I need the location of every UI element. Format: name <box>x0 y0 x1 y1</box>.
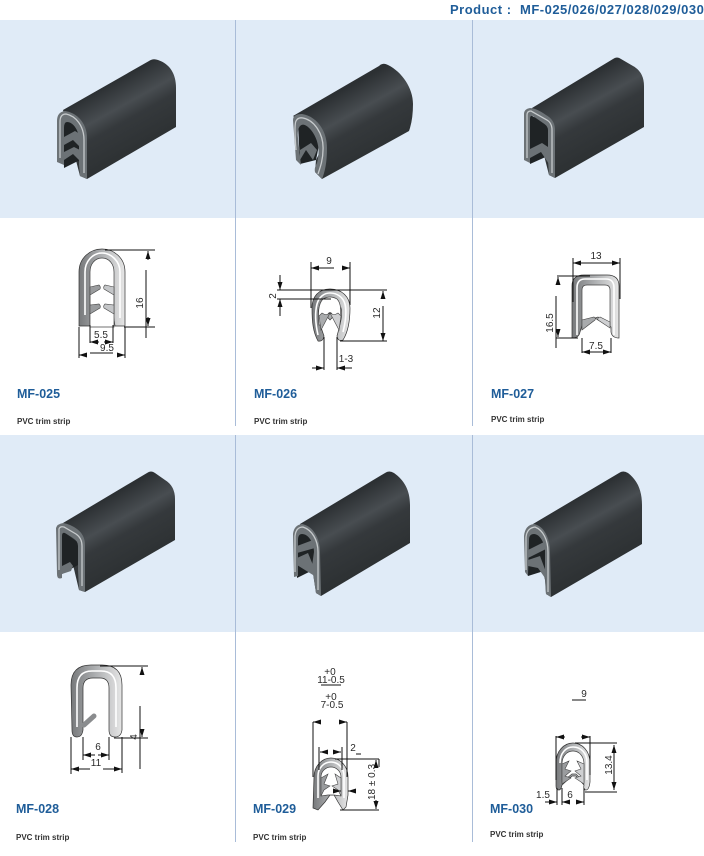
panel: MF-030 <box>490 472 642 839</box>
dimensions: MF-027: 13 <box>590 251 602 262</box>
3D render: MF-026 <box>293 64 413 179</box>
3D render: MF-027 <box>524 58 644 178</box>
3D render: MF-025 <box>57 59 176 179</box>
panel: MF-025 <box>17 59 176 426</box>
label: MF-025: MF-025 <box>17 387 60 401</box>
caption: MF-030: PVC trim strip <box>490 830 543 839</box>
dimensions: MF-028 <box>71 666 148 774</box>
panel: MF-028 <box>16 472 175 842</box>
dimensions: MF-029: +0 <box>324 667 336 678</box>
panel: MF-026 <box>254 64 413 426</box>
dimensions: MF-026: 1-3 <box>339 354 354 365</box>
dimensions: MF-030: 13.4 <box>604 755 615 775</box>
dimensions: MF-029: 18 ± 0.3 <box>367 764 378 800</box>
caption: MF-027: PVC trim strip <box>491 415 544 424</box>
cross-section drawing: MF-026 <box>312 289 350 341</box>
dimensions: MF-026 <box>268 256 387 370</box>
dimensions: MF-028: 6 <box>95 742 101 753</box>
dimensions: MF-027 <box>545 251 620 353</box>
dimensions: MF-026: 9 <box>326 256 332 267</box>
dimensions: MF-030: 9 <box>581 689 587 700</box>
3D render: MF-029 <box>293 472 410 596</box>
3D render: MF-028 <box>56 472 175 592</box>
caption: MF-029: PVC trim strip <box>253 833 306 842</box>
caption: MF-026: PVC trim strip <box>254 417 307 426</box>
dimensions: MF-030: 1.5 <box>536 790 550 801</box>
label: MF-026: MF-026 <box>254 387 297 401</box>
dimensions: MF-026: 2 <box>268 293 279 299</box>
dimensions: MF-029: 7-0.5 <box>321 700 344 711</box>
caption: MF-028: PVC trim strip <box>16 833 69 842</box>
dimensions: MF-027: 7.5 <box>589 341 603 352</box>
dimensions: MF-025 <box>79 250 155 358</box>
panel: MF-029 <box>253 472 410 842</box>
dimensions: MF-030 <box>536 689 617 805</box>
dimensions: MF-030: 6 <box>567 790 573 801</box>
header: product title: MF-025/026/027/028/029/030 <box>520 2 704 17</box>
label: MF-027: MF-027 <box>491 387 534 401</box>
cross-section drawing: MF-025 <box>79 249 125 327</box>
header: product title: Product : <box>450 2 512 17</box>
label: MF-028: MF-028 <box>16 802 59 816</box>
cross-section drawing: MF-030 <box>556 743 590 790</box>
dimensions: MF-025: 5.5 <box>94 330 108 341</box>
3D render: MF-030 <box>524 472 642 597</box>
dimensions: MF-028: 11 <box>91 758 102 769</box>
dimensions: MF-029: +0 <box>325 692 337 703</box>
cross-section drawing: MF-028 <box>71 665 122 737</box>
panel: MF-027 <box>491 58 644 424</box>
dimensions: MF-029 <box>313 667 379 810</box>
dimensions: MF-027: 16.5 <box>545 313 556 333</box>
dimensions: MF-029: 2 <box>350 743 356 754</box>
cross-section drawing: MF-027 <box>572 275 619 338</box>
dimensions: MF-025: 9.5 <box>100 343 114 354</box>
dimensions: MF-029: 11-0.5 <box>317 675 345 686</box>
dimensions: MF-026: 12 <box>372 307 383 319</box>
label: MF-029: MF-029 <box>253 802 296 816</box>
image band: row 1 <box>0 20 704 218</box>
caption: MF-025: PVC trim strip <box>17 417 70 426</box>
dimensions: MF-025: 16 <box>135 297 146 309</box>
cross-section drawing: MF-029 <box>313 758 348 810</box>
image band: row 2 <box>0 435 704 632</box>
dimensions: MF-028: 4 <box>129 734 140 740</box>
label: MF-030: MF-030 <box>490 802 533 816</box>
